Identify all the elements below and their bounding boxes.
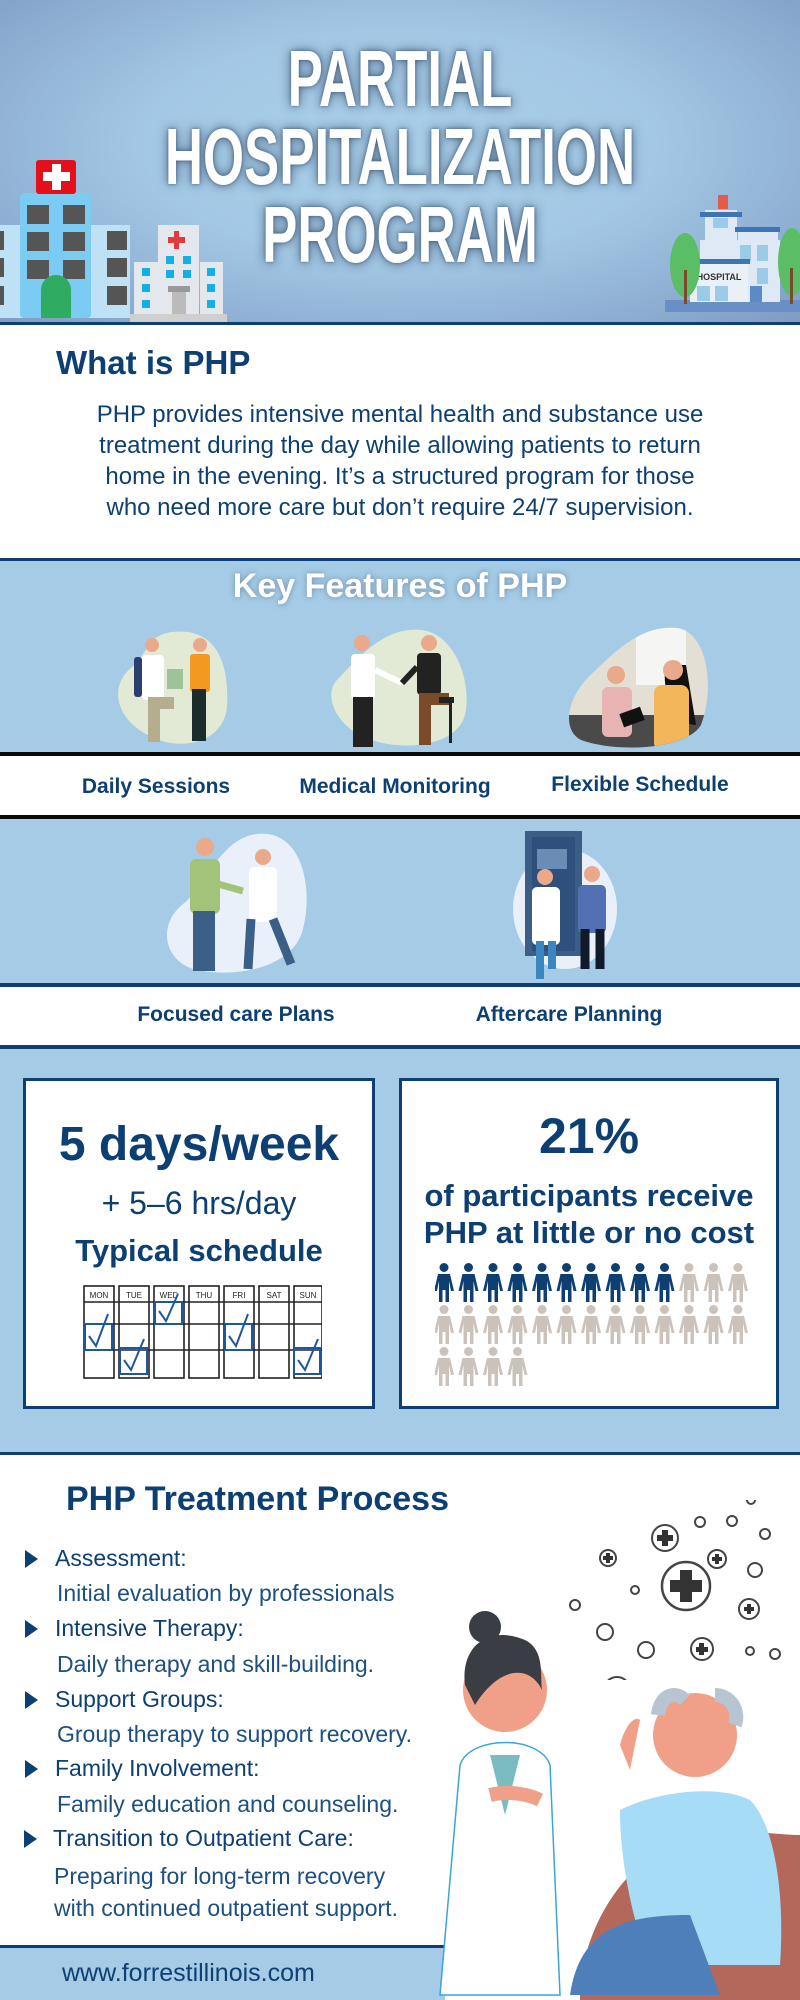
icon: medical cross bubbles (569, 1500, 781, 1680)
stat card: cost (399, 1078, 779, 1409)
icon: people pictogram (435, 1263, 748, 1386)
labels row 1 (82, 773, 729, 798)
text: PHP definition: who need more care but don’t require 24/7 supervision. (106, 494, 694, 521)
text: PHP definition: PHP provides intensive mental health and substance use (97, 401, 703, 428)
list: process steps: Preparing for long-term recovery (54, 1863, 385, 1889)
stat: 5 days/week: 5 days/week (59, 1118, 339, 1171)
icon: weekly calendar: FRI (233, 1291, 245, 1300)
stat: description: PHP at little or no cost (424, 1215, 754, 1250)
icon: weekly calendar: THU (196, 1291, 212, 1300)
icon: hospital buildings left (0, 160, 227, 322)
illustration: daily sessions (118, 632, 228, 744)
stat: typical schedule: Typical schedule (75, 1233, 323, 1268)
label: flexible schedule: Flexible Schedule (551, 773, 729, 796)
heading: key features: Key Features of PHP (233, 567, 567, 605)
icon: weekly calendar: WED (160, 1291, 179, 1300)
heading: what is PHP: What is PHP (56, 344, 250, 381)
label: daily sessions: Daily Sessions (82, 775, 230, 798)
label: medical monitoring: Medical Monitoring (299, 775, 491, 798)
stat card: schedule (23, 1078, 375, 1409)
list: process steps: Group therapy to support recovery. (57, 1721, 412, 1747)
panel: key features row 1 (0, 561, 800, 753)
icon: weekly calendar (83, 1285, 322, 1379)
section: treatment process (0, 1480, 800, 2000)
icon: weekly calendar: TUE (126, 1291, 142, 1300)
panel: stats band (0, 1049, 800, 1453)
icon: hospital building right (665, 195, 800, 312)
list: process steps: Assessment: (55, 1545, 187, 1571)
title: HOSPITALIZATION (165, 112, 635, 201)
stat: description: of participants receive (424, 1178, 754, 1213)
label: aftercare planning: Aftercare Planning (476, 1003, 662, 1026)
text: PHP definition: treatment during the day while allowing patients to return (99, 432, 701, 459)
stat: hours: + 5–6 hrs/day (102, 1185, 296, 1221)
icon: hospital building right: HOSPITAL (697, 272, 742, 282)
illustration: flexible schedule (569, 628, 708, 748)
footer: website (0, 1945, 445, 2000)
icon: weekly calendar: SUN (300, 1291, 317, 1300)
text: PHP definition (97, 401, 703, 521)
illustration: aftercare planning (513, 831, 617, 979)
title: PARTIAL (288, 34, 512, 123)
illustration: medical monitoring (331, 630, 467, 747)
text: PHP definition: home in the evening. It’s a structured program for those (105, 463, 695, 490)
list: process steps: Support Groups: (55, 1686, 224, 1712)
list: process steps (24, 1545, 412, 1921)
label: focused care plans: Focused care Plans (137, 1003, 335, 1026)
illustration: doctor and patient (439, 1611, 800, 2000)
labels row 2 (137, 1003, 662, 1026)
icon: weekly calendar: MON (90, 1291, 109, 1300)
title (160, 34, 640, 279)
list: process steps: Daily therapy and skill-building. (57, 1651, 374, 1677)
heading: treatment process: PHP Treatment Process (66, 1480, 449, 1518)
panel: key features row 2 (0, 819, 800, 983)
list: process steps: Transition to Outpatient Care: (53, 1825, 354, 1851)
list: process steps: Intensive Therapy: (55, 1615, 244, 1641)
list: process steps: Family education and counseling. (57, 1791, 398, 1817)
section: what is PHP (56, 344, 703, 521)
list: process steps: Initial evaluation by professionals (57, 1580, 395, 1606)
illustration: focused care plans (167, 834, 307, 973)
list: process steps: Family Involvement: (55, 1755, 260, 1781)
icon: weekly calendar: SAT (267, 1291, 282, 1300)
title: PROGRAM (262, 190, 538, 279)
stat: 21%: 21% (539, 1108, 639, 1164)
list: process steps: with continued outpatient support. (54, 1895, 398, 1921)
stat: description (424, 1178, 754, 1250)
header banner (0, 0, 800, 323)
footer: website: www.forrestillinois.com (62, 1959, 315, 1987)
